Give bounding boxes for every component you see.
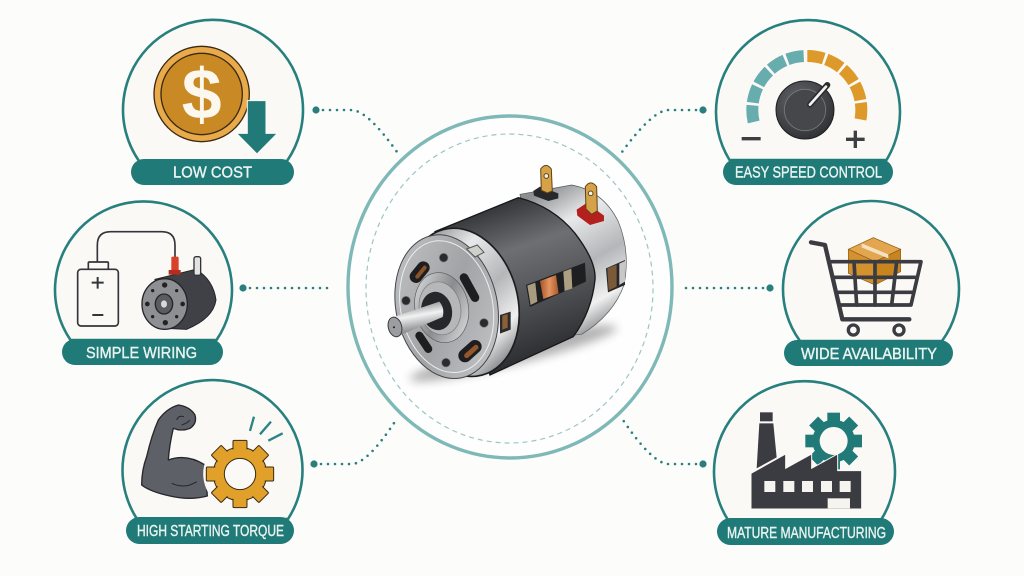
- label: low cost: [131, 159, 294, 185]
- collar window: [500, 312, 511, 334]
- panel: easy speed control: [716, 20, 900, 185]
- icon: coin with down arrow: $: [182, 54, 222, 134]
- label: simple wiring: SIMPLE WIRING: [86, 345, 197, 362]
- connector: wide availability: [681, 284, 774, 292]
- label: high starting torque: HIGH STARTING TORQUE: [137, 523, 284, 540]
- gauge segments: [752, 56, 806, 122]
- label: low cost: LOW COST: [173, 164, 252, 182]
- connector: low cost: [312, 106, 397, 152]
- label: simple wiring: [62, 339, 223, 365]
- rear slot: [606, 260, 625, 292]
- connector: simple wiring: [239, 284, 332, 292]
- vent slots: [416, 268, 476, 356]
- gear: [203, 437, 277, 511]
- teal gear: [805, 413, 862, 469]
- dark body: [435, 198, 595, 375]
- minus and plus: [742, 131, 865, 148]
- icon: factory and gear: [751, 412, 862, 509]
- label: mature manufacturing: [717, 518, 894, 545]
- hub: [408, 268, 475, 348]
- box: [848, 238, 901, 285]
- outer ring: [348, 116, 672, 458]
- wheels: [848, 325, 904, 335]
- rear silver housing: [520, 185, 626, 338]
- label: wide availability: WIDE AVAILABILITY: [801, 346, 937, 363]
- arm: [142, 405, 207, 498]
- bolt holes: [402, 253, 488, 367]
- motor illustration: [382, 165, 626, 390]
- face plate: [382, 225, 511, 388]
- panel: high starting torque: [123, 380, 303, 544]
- motion lines: [250, 417, 283, 441]
- label: high starting torque: [126, 517, 294, 544]
- panel: simple wiring: [55, 201, 232, 365]
- central motor panel: [348, 116, 672, 458]
- label: wide availability: [784, 340, 953, 366]
- building: [751, 454, 862, 509]
- icon: coin with down arrow: [154, 46, 277, 154]
- wire: [97, 232, 175, 262]
- chimney: [757, 412, 777, 468]
- panel: low cost: [123, 20, 303, 185]
- small motor: [155, 269, 216, 329]
- icon: flexed arm and gear: [142, 405, 283, 511]
- panel: wide availability: [783, 201, 959, 366]
- windows: [764, 481, 851, 508]
- dashed inner ring: [366, 134, 653, 443]
- knob: [776, 81, 834, 139]
- label: easy speed control: EASY SPEED CONTROL: [735, 164, 882, 182]
- body window: [526, 263, 586, 307]
- shaft: [386, 302, 443, 338]
- front collar: [390, 215, 535, 389]
- connector: high starting torque: [310, 420, 396, 468]
- black terminal: [533, 165, 558, 201]
- icon: shopping cart with box: [811, 238, 921, 335]
- mounting tab: [467, 245, 484, 257]
- cart: [811, 242, 921, 319]
- label: easy speed control: [723, 159, 893, 185]
- label: mature manufacturing: MATURE MANUFACTURING: [727, 525, 886, 542]
- red terminal: [577, 183, 604, 225]
- icon: battery and motor wiring: [78, 232, 216, 329]
- connector: easy speed control: [622, 106, 707, 152]
- connector: mature manufacturing: [623, 420, 707, 468]
- battery: [78, 262, 118, 326]
- panel: mature manufacturing: [714, 381, 895, 545]
- icon: speed dial: [742, 56, 865, 148]
